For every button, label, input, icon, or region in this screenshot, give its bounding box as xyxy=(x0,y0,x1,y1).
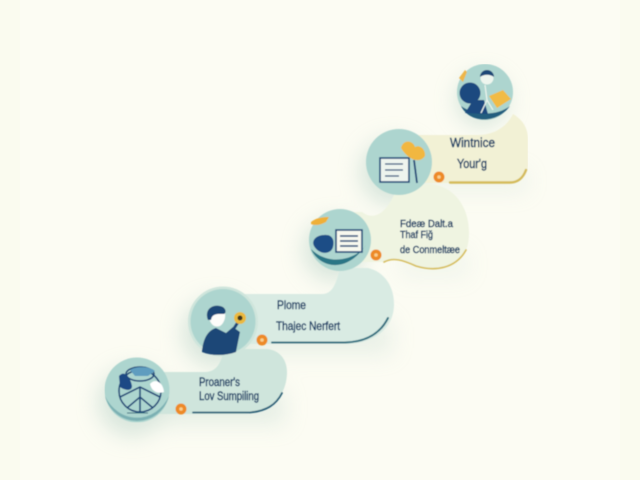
panel: step 2 xyxy=(222,268,394,344)
panel 4 text: Your'g xyxy=(457,157,487,171)
icon: step 1 globe circle xyxy=(104,358,170,422)
icon: orange marker 2 xyxy=(256,334,268,346)
icon: step 2 person circle xyxy=(188,286,258,356)
panel 3 text: de Conmeltæe xyxy=(400,244,460,256)
panel 3 text: Fdeæ Dalt.a xyxy=(400,218,453,230)
panel 2 text: Thajec Nerfert xyxy=(276,319,341,333)
panel 2 text: Plome xyxy=(277,298,306,312)
panel: step 4 xyxy=(398,114,528,183)
soft shadows xyxy=(98,74,527,436)
panel 3 text xyxy=(400,218,460,256)
icon: step 5 circle xyxy=(457,64,513,120)
panel 2 text xyxy=(276,298,341,333)
panel 1 text: Lov Sumpiling xyxy=(199,391,259,403)
icon: step 3 document circle xyxy=(309,209,371,271)
icon: step 4 card circle xyxy=(366,129,432,195)
panel 4 text: Wintnice xyxy=(450,136,495,150)
panel 1 text: Proaner's xyxy=(199,377,240,389)
icon: orange marker 1 xyxy=(176,404,186,414)
panel 3 text: Thaf Fiğ xyxy=(400,229,433,241)
panel 4 text xyxy=(450,136,495,171)
panel 1 text xyxy=(199,377,259,403)
panel: step 1 xyxy=(137,349,287,414)
icon: orange marker 4 xyxy=(434,172,444,182)
panel: step 3 xyxy=(345,184,469,269)
icon: orange marker 3 xyxy=(370,250,382,260)
